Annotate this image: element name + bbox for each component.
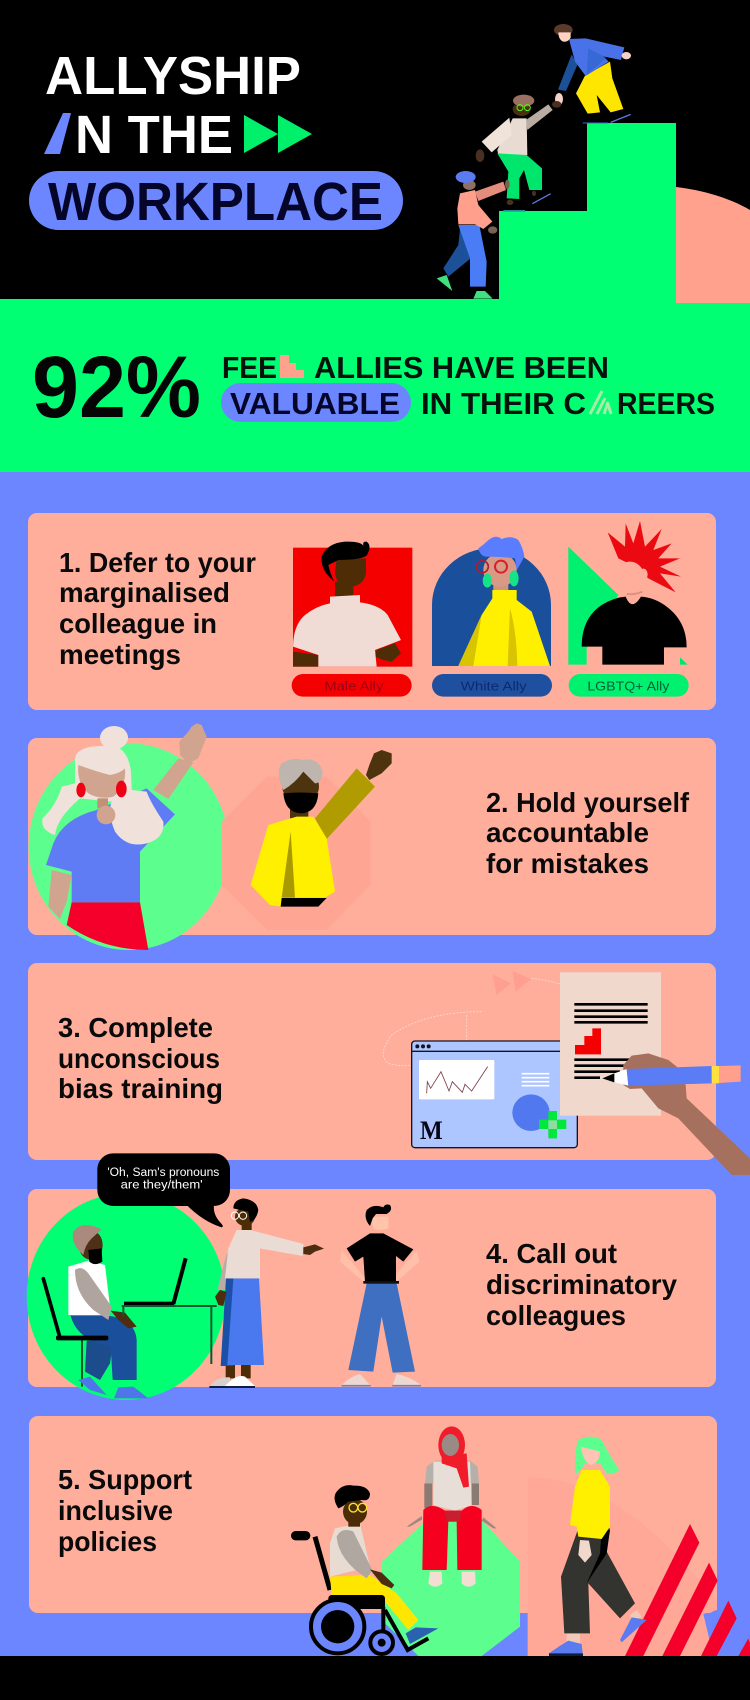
laptop and desk	[122, 1258, 217, 1364]
red stripes	[625, 1524, 750, 1656]
illustration: people climbing steps	[437, 24, 631, 299]
lgbtq ally label	[569, 674, 689, 697]
panel 3 text	[58, 1012, 223, 1104]
salmon backdrop	[528, 1477, 717, 1656]
stat number: 92%: 92%	[32, 339, 201, 436]
white ally label: White Ally	[461, 679, 527, 694]
white ally label	[432, 674, 552, 697]
wheelchair user	[291, 1485, 438, 1654]
stat text: VALUABLE	[230, 386, 400, 421]
stat text: IN THEIR C	[421, 386, 586, 421]
panel 2: accountable for mistakes	[28, 723, 716, 950]
panel 2 text: accountable	[486, 817, 649, 848]
stat band	[0, 299, 750, 472]
browser window	[412, 1041, 577, 1148]
panel 2 text: for mistakes	[486, 848, 649, 879]
panel 5 text	[58, 1464, 192, 1557]
header band	[0, 0, 750, 303]
panel 2 text: 2. Hold yourself	[486, 787, 690, 818]
person in hijab	[407, 1426, 497, 1587]
panel 3 text: 3. Complete	[58, 1012, 213, 1043]
panel 4: call out colleagues	[27, 1153, 716, 1400]
browser window: M	[420, 1116, 443, 1145]
title: ALLYSHIP	[45, 46, 301, 106]
footer band	[0, 1656, 750, 1700]
green octagon	[382, 1520, 520, 1656]
man in turban	[251, 750, 392, 907]
seated person at laptop	[43, 1225, 148, 1398]
panel 2 text	[486, 787, 690, 879]
salmon circle base overlapping the green band	[676, 299, 750, 303]
panel 5 text: 5. Support	[58, 1464, 192, 1495]
speech bubble: are they/them'	[121, 1177, 203, 1191]
dashed path	[383, 978, 565, 1083]
illustration: calling out a colleague	[27, 1153, 421, 1400]
panel 1: defer in meetings	[28, 513, 716, 710]
illustration: two people raising hands	[29, 723, 392, 950]
octagon	[222, 777, 371, 930]
panel 4 text	[486, 1238, 678, 1331]
panel 1 text	[59, 547, 256, 670]
pointing person	[209, 1198, 324, 1388]
panel 4 text: discriminatory	[486, 1269, 678, 1300]
title: WORKPLACE	[48, 172, 383, 232]
panel 4 text: colleagues	[486, 1300, 626, 1331]
walking person	[549, 1437, 647, 1656]
paper document	[560, 972, 661, 1116]
white ally portrait	[432, 537, 551, 666]
illustration: wheelchair user and colleagues	[291, 1426, 750, 1656]
staircase	[499, 123, 676, 300]
illustration: training document and browser	[383, 971, 750, 1175]
panel 5 text: inclusive	[58, 1495, 173, 1526]
middle figure	[476, 95, 561, 211]
salmon quarter circle	[676, 187, 750, 303]
ally portraits	[292, 521, 689, 697]
title: N THE	[75, 105, 233, 165]
panel 1 text: colleague in	[59, 608, 217, 639]
male ally label: Male Ally	[324, 679, 384, 694]
panel 4 text: 4. Call out	[486, 1238, 617, 1269]
bottom figure	[437, 171, 510, 299]
speech bubble	[97, 1153, 230, 1227]
male ally label	[292, 674, 412, 697]
male ally portrait	[293, 542, 412, 667]
panel 3 text: bias training	[58, 1073, 223, 1104]
woman	[42, 723, 207, 950]
panel 3 text: unconscious	[58, 1043, 220, 1074]
black tee person	[340, 1205, 421, 1386]
panel 3: unconscious bias training	[28, 963, 750, 1175]
panel 5: inclusive policies	[29, 1416, 750, 1656]
green circle	[29, 743, 229, 950]
stat text: FEE	[222, 350, 277, 385]
panel 1 text: marginalised	[59, 577, 230, 608]
panel 5 text: policies	[58, 1526, 157, 1557]
pale triangles	[492, 971, 531, 995]
stat text: REERS	[617, 386, 715, 421]
speech bubble: 'Oh, Sam's pronouns	[107, 1165, 219, 1179]
panel 1 text: meetings	[59, 639, 181, 670]
title	[29, 46, 403, 232]
top figure	[554, 24, 631, 123]
lgbtq ally label: LGBTQ+ Ally	[587, 679, 670, 694]
stat text: ALLIES HAVE BEEN	[314, 350, 609, 385]
hand holding pen	[602, 1053, 750, 1175]
stat text	[221, 350, 715, 422]
lgbtq ally portrait	[568, 521, 688, 665]
panel 1 text: 1. Defer to your	[59, 547, 256, 578]
green circle	[27, 1193, 225, 1400]
